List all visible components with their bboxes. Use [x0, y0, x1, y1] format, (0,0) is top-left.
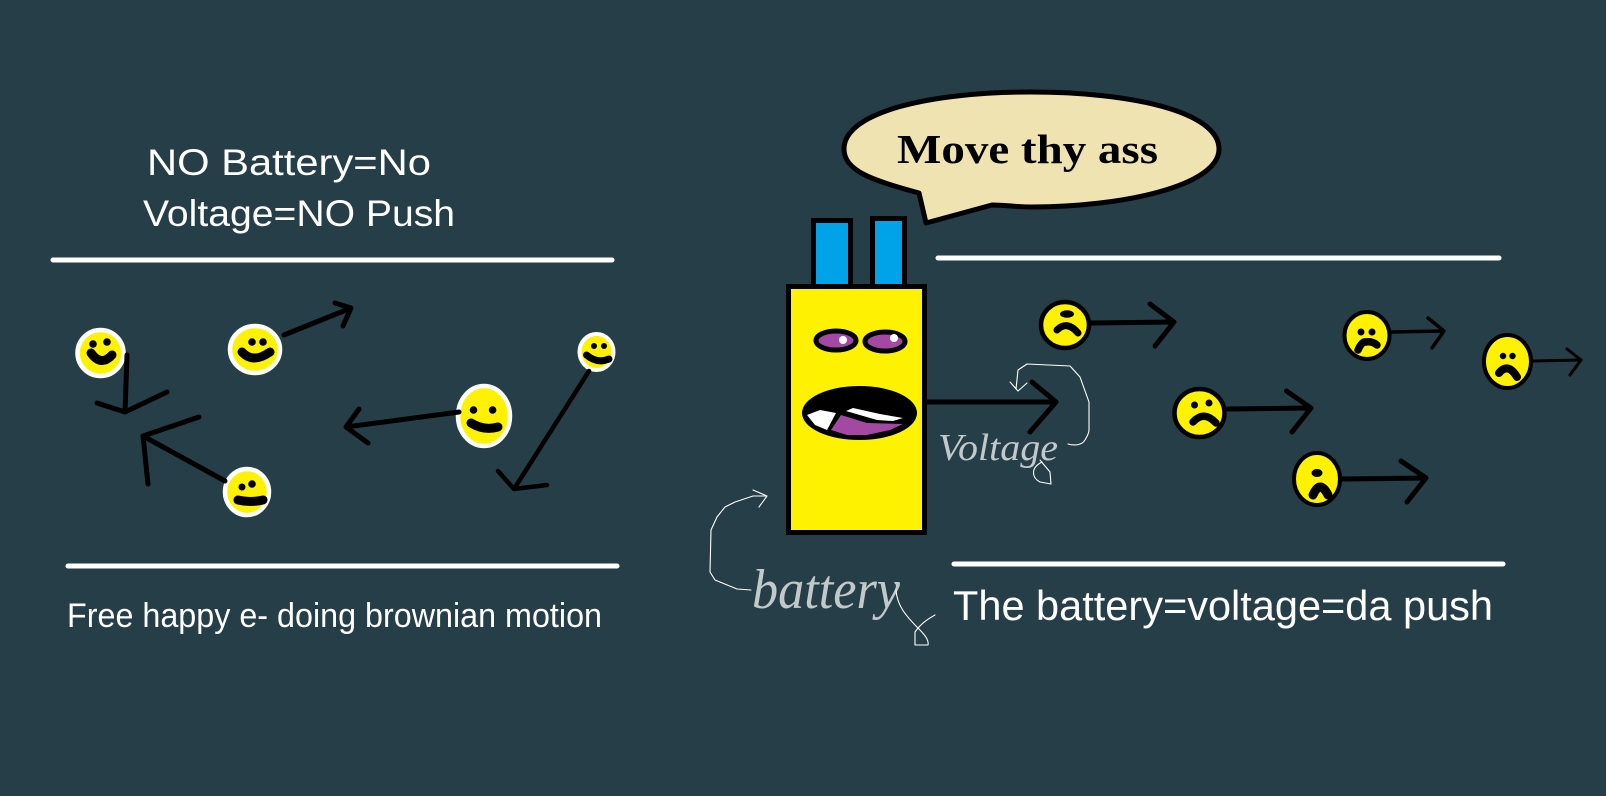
annotation: battery	[710, 490, 935, 645]
callout: speech bubble	[844, 92, 1219, 223]
sad electron A with arrow	[1041, 302, 1174, 348]
sad electron B with arrow	[1174, 389, 1311, 437]
sad electron E with arrow	[1294, 453, 1426, 505]
happy electron 5 with arrow	[498, 334, 614, 489]
happy electron 3 with arrow	[143, 417, 269, 515]
battery mouth	[802, 386, 917, 440]
heading: no battery: Voltage=NO Push	[143, 193, 455, 234]
annotation: battery: battery	[752, 559, 900, 621]
arrow: voltage push	[927, 382, 1056, 432]
happy electron 1 with arrow	[78, 330, 167, 412]
heading: no battery	[143, 142, 455, 234]
sad electron C with arrow	[1344, 312, 1444, 359]
battery eyes	[816, 331, 905, 351]
battery body	[788, 286, 924, 532]
heading: no battery: NO Battery=No	[147, 142, 431, 183]
panel: no battery	[53, 142, 617, 635]
panel: with battery	[938, 258, 1581, 629]
sad electron D with arrow	[1484, 335, 1581, 388]
battery terminals	[814, 218, 904, 286]
annotation: voltage: Voltage	[938, 427, 1058, 469]
annotation: voltage	[938, 364, 1089, 484]
happy electron 4 with arrow	[346, 386, 510, 446]
caption: battery is voltage: The battery=voltage=da push	[953, 582, 1493, 629]
caption: free electrons: Free happy e- doing brownian motion	[67, 597, 602, 635]
callout: speech bubble: Move thy ass	[897, 126, 1158, 172]
battery character	[788, 218, 924, 532]
happy electron 2 with arrow	[230, 303, 351, 373]
